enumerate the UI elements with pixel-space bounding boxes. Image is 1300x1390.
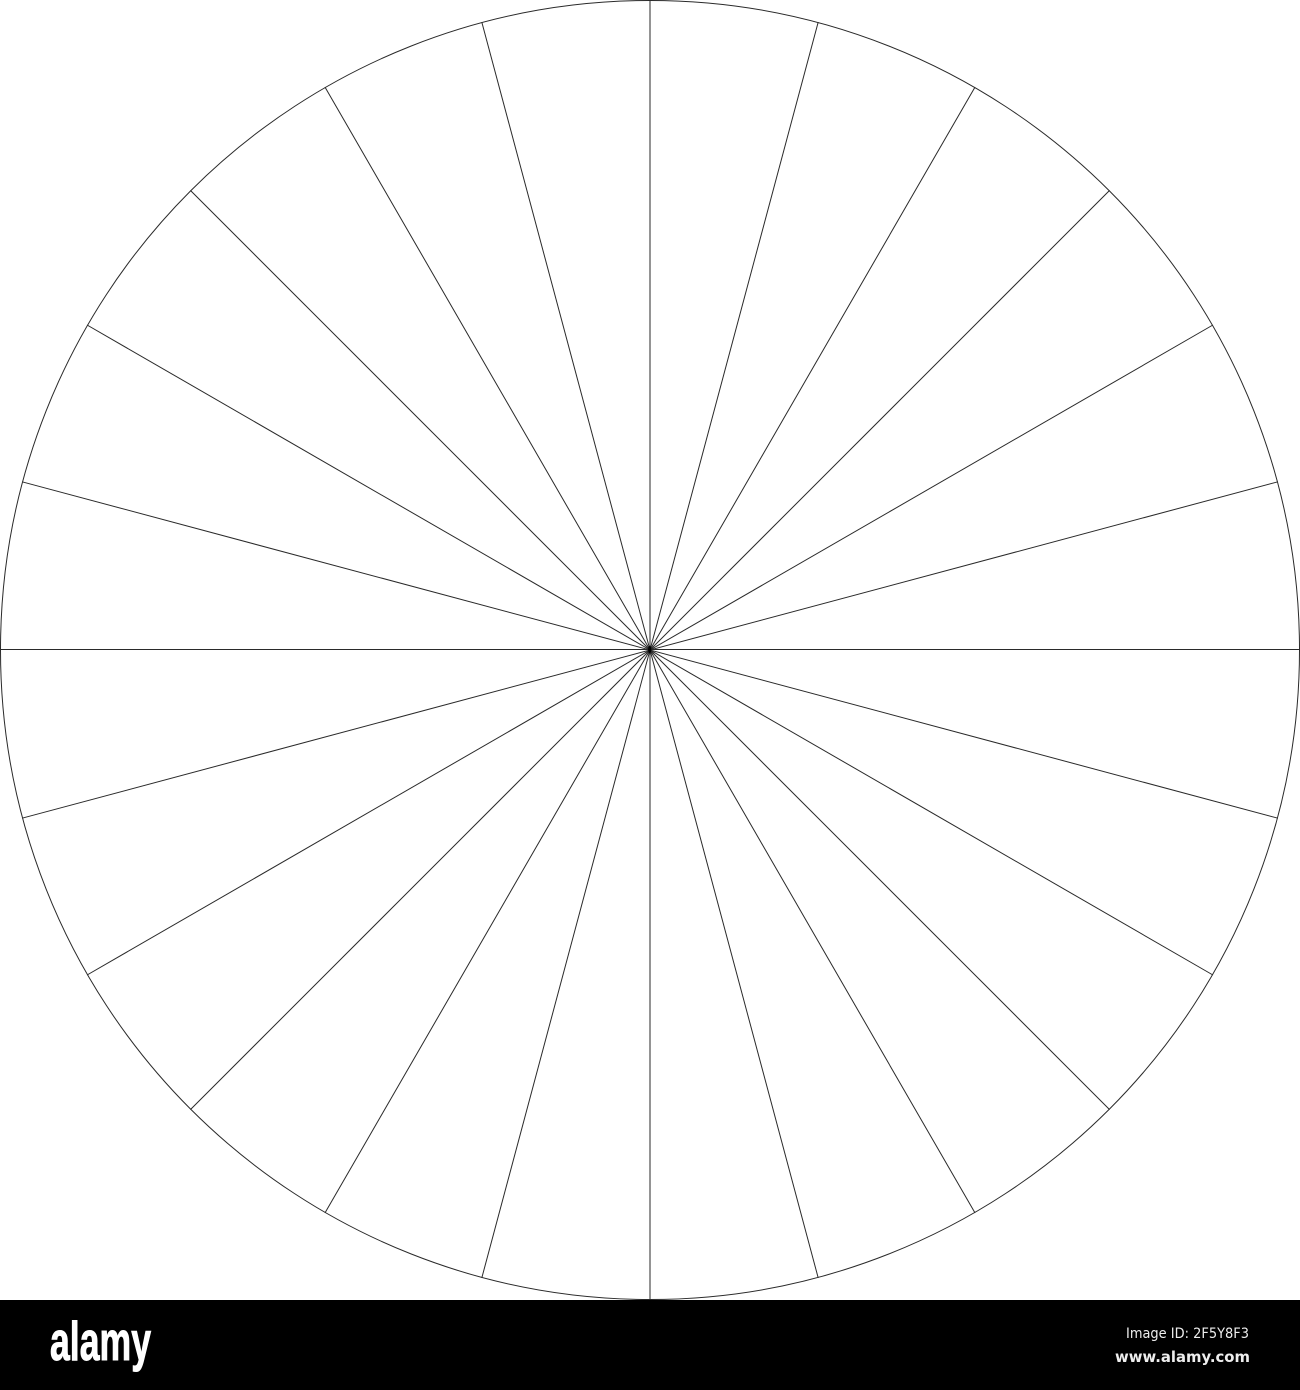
watermark footer bar	[0, 1300, 1300, 1390]
website: www.alamy.com	[1115, 1348, 1250, 1366]
image id: Image ID: 2F5Y8F3	[1126, 1326, 1249, 1342]
alamy logo: alamy	[50, 1310, 151, 1372]
